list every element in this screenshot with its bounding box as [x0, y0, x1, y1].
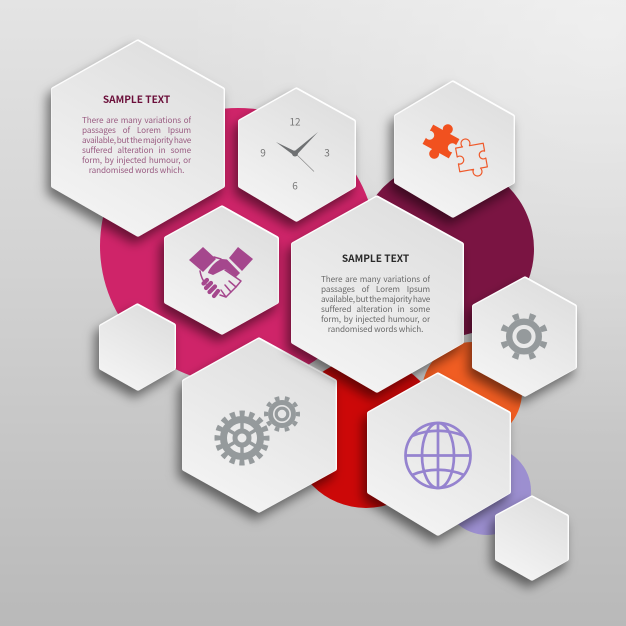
icon: handshake: [189, 247, 253, 297]
text block: top-left panel: [82, 91, 191, 175]
circle: lavender: [443, 447, 531, 535]
hexagon: center text panel: [293, 198, 462, 391]
icon: clock: [260, 114, 330, 192]
icon: two gears: [218, 398, 298, 462]
hexagon: clock panel: [240, 90, 354, 220]
hexagon: handshake panel: [166, 208, 276, 333]
heading: SAMPLE TEXT: [103, 91, 170, 106]
heading: SAMPLE TEXT: [342, 250, 409, 265]
hexagon: globe panel: [369, 375, 508, 534]
text block: center panel: [321, 250, 430, 334]
paragraph: [321, 274, 430, 334]
hexagon: puzzle panel: [396, 83, 512, 216]
circle: orange: [422, 342, 522, 442]
hexagon: small blank left: [101, 306, 174, 389]
circles behind hexagons: [100, 108, 534, 535]
hexagon: top-left text panel: [53, 42, 222, 235]
circle: red: [291, 358, 441, 508]
icon: gear: [503, 316, 545, 358]
icon: clock: 3: [324, 144, 330, 160]
hexagon: small blank right: [497, 498, 566, 579]
icon: puzzle pieces: [419, 118, 489, 179]
circle: pink: [100, 108, 376, 384]
icon: clock: 9: [260, 144, 266, 160]
icon: clock: 12: [289, 114, 301, 128]
hexagon: gears panel: [184, 340, 334, 511]
circle: dark purple: [358, 161, 534, 337]
paragraph: [82, 115, 191, 175]
hexagon: gear panel: [474, 279, 574, 395]
icon: globe: [406, 423, 470, 488]
icon: clock: 6: [292, 178, 298, 192]
